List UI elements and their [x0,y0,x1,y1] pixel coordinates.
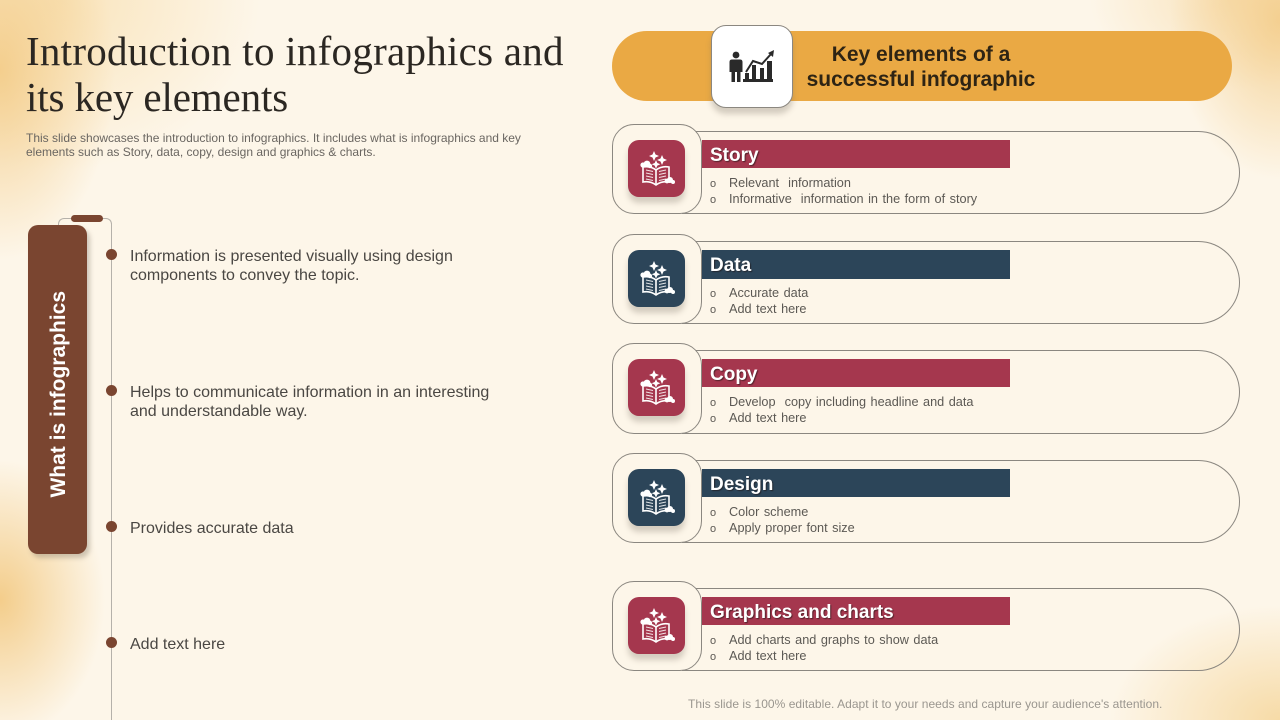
timeline connector [58,218,78,228]
panel: what is infographics [28,225,87,554]
vertical heading: What is infographics [46,291,70,497]
capsule outline [682,588,1240,671]
point 1 text: Information is presented visually using design [130,248,453,265]
band heading [702,469,1010,497]
icon: open book [628,469,685,526]
banner heading [807,43,1035,91]
icon: person with chart [711,25,793,108]
icon: open book [628,597,685,654]
title: its key elements [26,74,288,120]
list text: o [710,413,716,425]
list text [710,176,977,206]
list text: o [710,635,716,647]
row: Graphics and charts [612,581,1240,671]
list text: Add text here [729,302,806,316]
bullet 3 [106,521,117,532]
header banner [612,31,1232,101]
bullet 2 [106,385,117,396]
timeline line [95,218,112,720]
list text: o [710,194,716,206]
list text: Relevant information [729,176,851,190]
icon box [612,343,702,434]
band heading [702,359,1010,387]
list text: Apply proper font size [729,521,855,535]
icon box [612,234,702,324]
list text: Add text here [729,649,806,663]
band heading: Story [710,145,759,166]
list text: o [710,397,716,409]
list text: o [710,288,716,300]
point 4 text: Add text here [130,636,225,653]
list text: o [710,651,716,663]
icon box [612,581,702,671]
list text: Accurate data [729,286,808,300]
band heading: Graphics and charts [710,602,894,623]
list text: Develop copy including headline and data [729,395,973,409]
footer note: This slide is 100% editable. Adapt it to your needs and capture your audience's attention. [688,697,1162,711]
icon box [612,124,702,214]
capsule outline [682,131,1240,214]
point 2 text: and understandable way. [130,403,308,420]
timeline cap [71,215,103,222]
point 2 text: Helps to communicate information in an interesting [130,384,489,401]
band heading [702,597,1010,625]
capsule outline [682,460,1240,543]
list text: o [710,507,716,519]
subtitle text [26,131,521,159]
list text: o [710,304,716,316]
band heading [702,140,1010,168]
capsule outline [682,350,1240,434]
subtitle text: This slide showcases the introduction to infographics. It includes what is infographics and key [26,131,521,145]
row: Copy [612,343,1240,434]
icon: open book [628,140,685,197]
row: Story [612,124,1240,214]
list text: Add text here [729,411,806,425]
icon box [612,453,702,543]
point 1 text [130,248,453,284]
band heading [702,250,1010,279]
icon: open book [628,359,685,416]
band heading: Data [710,255,751,276]
banner heading: Key elements of a [832,43,1010,66]
band heading: Copy [710,364,758,385]
list text [710,395,974,425]
list text: Informative information in the form of story [729,192,977,206]
bullet 1 [106,249,117,260]
title: Introduction to infographics and [26,28,564,74]
list text [710,286,808,316]
bullet 4 [106,637,117,648]
list text: Color scheme [729,505,808,519]
list text [710,505,855,535]
list text: o [710,178,716,190]
list text [710,633,938,663]
icon: open book [628,250,685,307]
capsule outline [682,241,1240,324]
row: Design [612,453,1240,543]
list text: Add charts and graphs to show data [729,633,938,647]
banner heading: successful infographic [807,68,1035,91]
subtitle text: elements such as Story, data, copy, design and graphics & charts. [26,145,376,159]
band heading: Design [710,474,773,495]
point 2 text [130,384,489,420]
title [26,28,564,120]
list text: o [710,523,716,535]
point 3 text: Provides accurate data [130,520,294,537]
point 1 text: components to convey the topic. [130,267,359,284]
row: Data [612,234,1240,324]
